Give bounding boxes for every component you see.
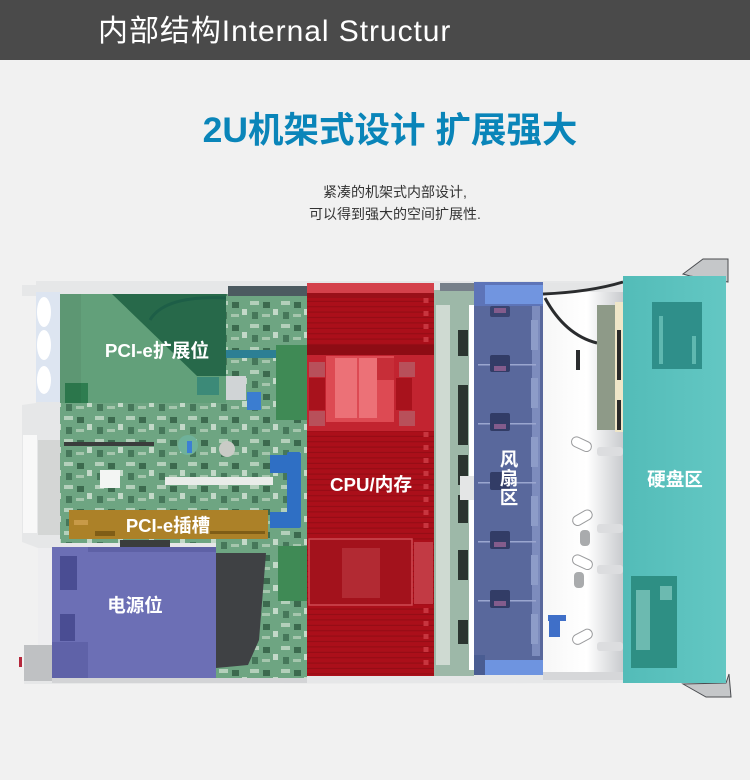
mid board between CPU and fans <box>434 283 474 676</box>
panel: power supply bay <box>52 547 216 678</box>
chassis <box>19 281 625 684</box>
panel: PCI-e slots: PCI-e插槽 <box>126 515 210 536</box>
rack ears <box>683 259 731 697</box>
silver bay <box>543 282 623 680</box>
label: fan zone: 区 <box>500 487 518 508</box>
panel: PCI-e expansion slot <box>60 294 226 403</box>
panel: CPU and memory <box>307 283 434 676</box>
header bar: 内部结构Internal Structur <box>98 15 451 48</box>
header bar <box>0 0 750 60</box>
description text <box>309 184 481 222</box>
panel: hard disk bay <box>623 276 726 683</box>
fan tray region <box>474 282 543 675</box>
description text: 可以得到强大的空间扩展性. <box>309 206 481 222</box>
panel: power supply bay: 电源位 <box>107 595 163 616</box>
panel: hard disk bay: 硬盘区 <box>647 469 703 490</box>
panel: PCI-e slots <box>69 510 268 539</box>
panel: PCI-e expansion slot: PCI-e扩展位 <box>105 339 209 361</box>
main board <box>60 286 307 678</box>
panel: CPU and memory: CPU/内存 <box>330 474 412 495</box>
label: fan zone: 扇 <box>500 468 518 489</box>
description text: 紧凑的机架式内部设计, <box>323 184 467 200</box>
label: fan zone: 风 <box>500 449 519 470</box>
title: 2U机架式设计 扩展强大 <box>203 110 577 150</box>
